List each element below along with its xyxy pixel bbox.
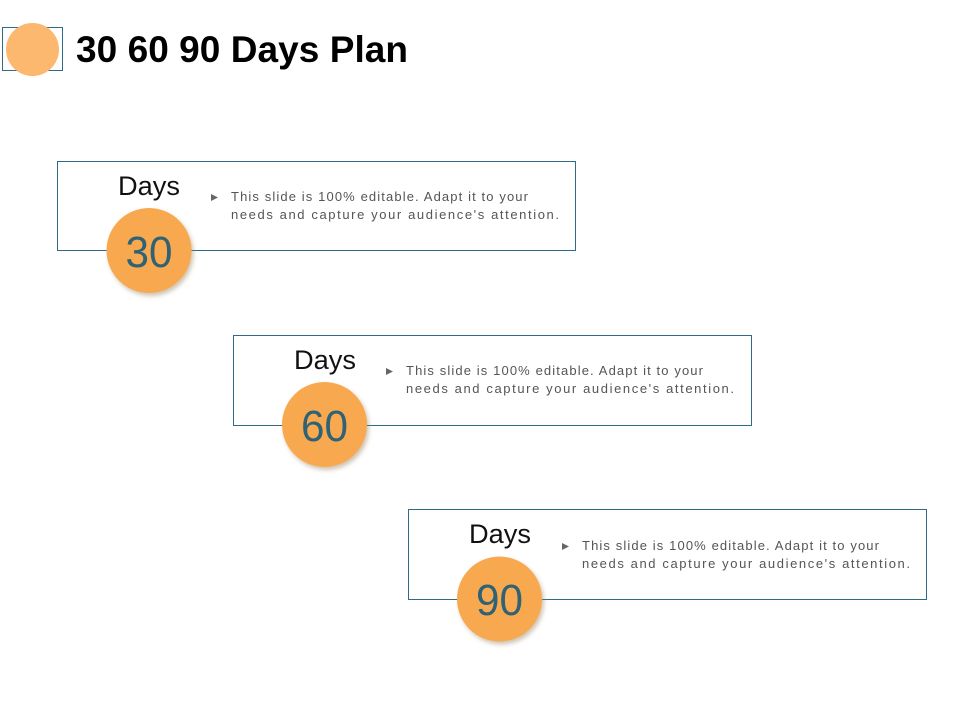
bullet text [562,538,910,571]
panel: 90 days [408,510,926,642]
badge: 90: 90 [476,576,523,625]
bullet text: This slide is 100% editable. Adapt it to your [406,363,704,378]
bullet text [211,189,559,222]
bullet text: This slide is 100% editable. Adapt it to your [582,538,880,553]
bullet text [386,363,734,396]
heading: days: Days [469,519,531,549]
title icon [2,23,62,76]
bullet text: needs and capture your audience's attention. [231,207,559,222]
panel frame [234,336,752,426]
badge: 60 [282,382,367,467]
bullet text: This slide is 100% editable. Adapt it to your [231,189,529,204]
bullet text: needs and capture your audience's attention. [582,556,910,571]
panel: 30 days [58,162,576,293]
heading: days: Days [294,345,356,375]
panel frame [408,510,926,600]
bullet text: needs and capture your audience's attention. [406,381,734,396]
heading: days: Days [118,171,180,201]
badge: 30 [106,208,192,293]
badge: 90 [457,556,542,642]
panel: 60 days [234,336,752,467]
badge: 60: 60 [301,402,348,451]
badge: 30: 30 [126,228,172,277]
title: 30 60 90 Days Plan [76,29,408,70]
panel frame [58,162,576,250]
